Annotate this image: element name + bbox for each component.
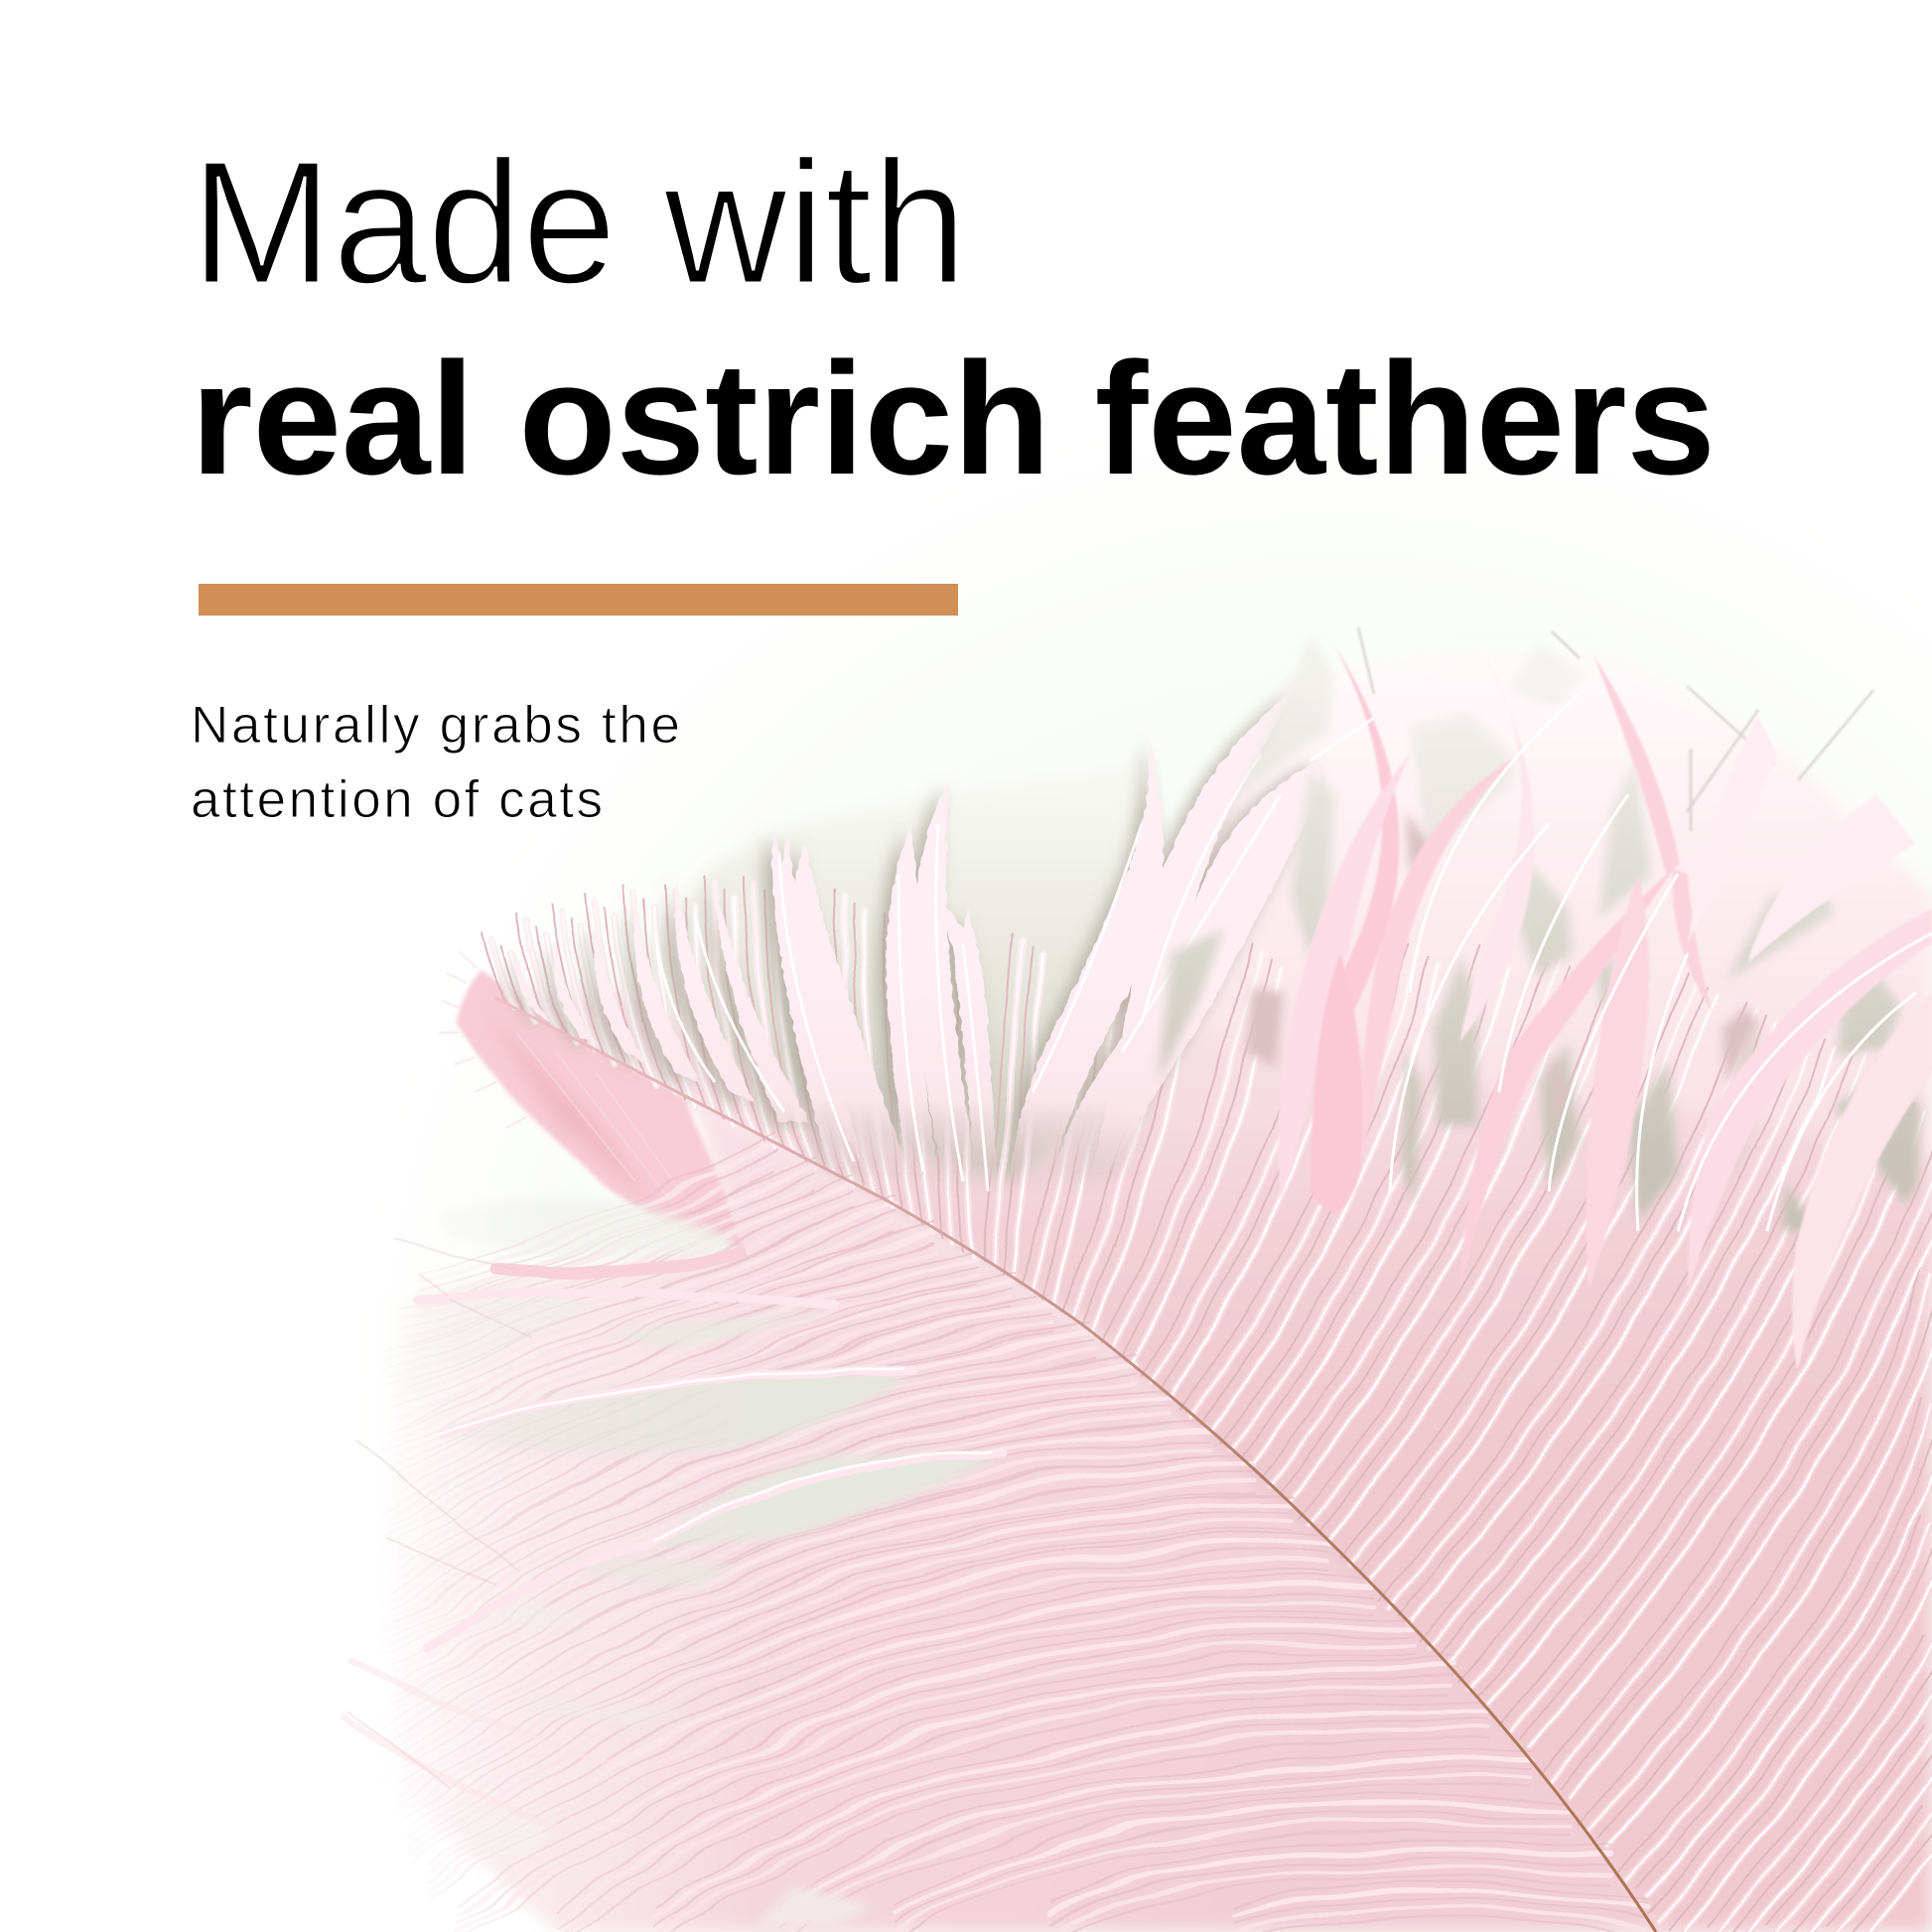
feather tip tuft — [456, 971, 745, 1249]
subtitle text: Naturally grabs the — [191, 696, 680, 755]
feather tip deep pink shading — [486, 1013, 655, 1206]
shaft — [495, 998, 1656, 1932]
subtitle text — [191, 696, 680, 829]
dusty pink shaded gaps — [1246, 812, 1758, 1132]
feather photograph illustration — [343, 627, 1932, 1932]
pink top plumes — [1279, 645, 1932, 1370]
white top strands — [1311, 695, 1932, 1231]
lower plume highlights — [343, 1239, 1004, 1829]
left pale feather tufts — [515, 686, 1320, 1211]
tuft inner strands — [655, 755, 1281, 1191]
lower gaps between barbs — [475, 1201, 995, 1928]
upper barbs — [482, 877, 1932, 1932]
grey gaps between top plumes — [1158, 635, 1921, 1231]
pale top plume base — [1052, 655, 1932, 1291]
cream shadow field behind left tufts — [645, 764, 1172, 1211]
pink upper vane — [496, 993, 1932, 1932]
subtitle text: attention of cats — [191, 770, 603, 829]
feather tip fine fringe — [439, 951, 705, 1226]
orange accent bar — [199, 584, 958, 616]
title line two: real ostrich feathers — [191, 330, 1716, 508]
thin grey plume tips — [1358, 627, 1873, 831]
pink lower vane — [377, 1097, 1668, 1932]
lower barbs — [377, 1133, 1648, 1932]
title line one: Made with — [191, 124, 967, 321]
